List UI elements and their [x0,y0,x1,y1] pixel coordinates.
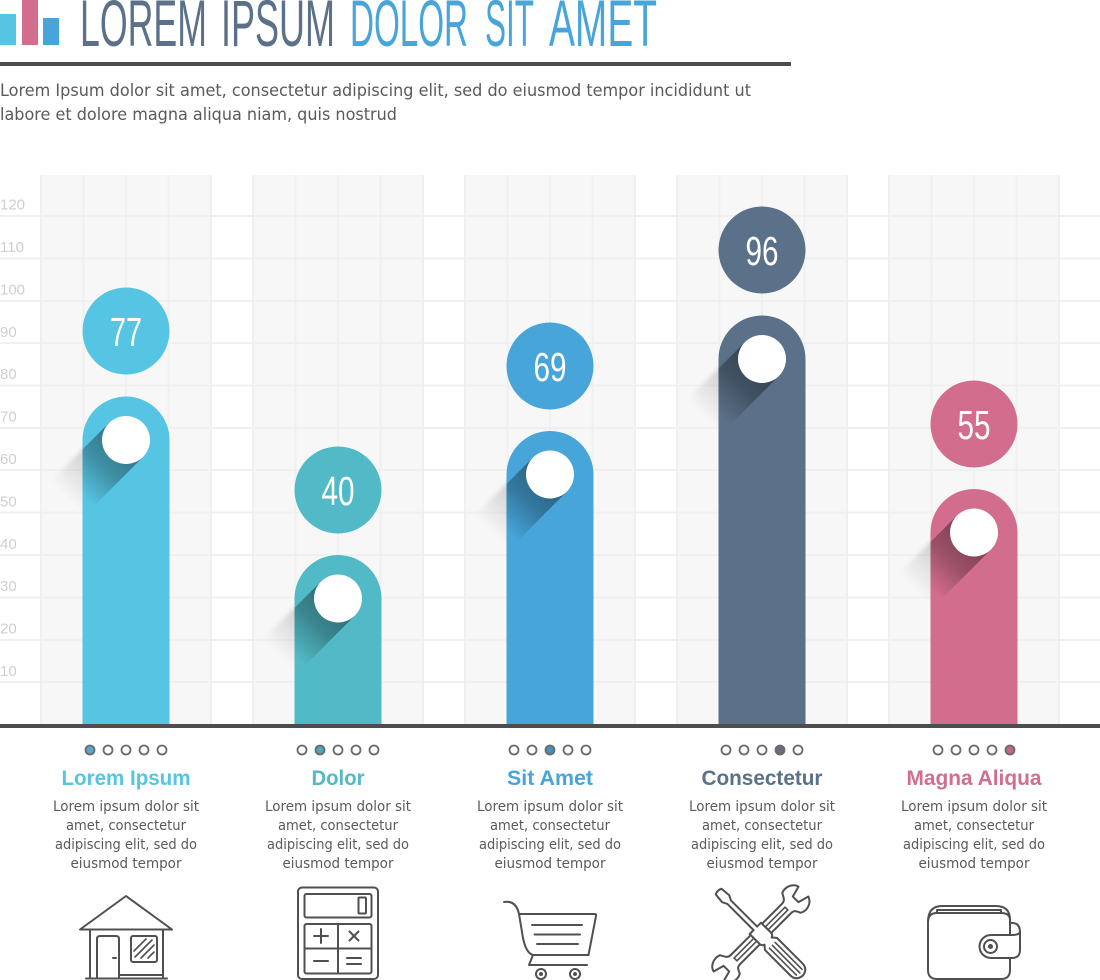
y axis labels [0,196,25,680]
y axis labels: 90 [0,324,17,341]
column: Sit Amet [477,746,623,979]
column: Lorem Ipsum [53,746,199,978]
y axis labels: 60 [0,451,17,468]
bar: Lorem Ipsum 77: 77 [110,309,142,355]
description: eiusmod tempor [494,856,606,872]
bar: Magna Aliqua 55 [890,380,1018,724]
y axis labels: 50 [0,494,17,510]
pagination dots [510,746,590,754]
y axis labels: 10 [0,663,17,680]
pagination dots [86,746,166,754]
heading: Consectetur [702,767,822,790]
heading: Magna Aliqua [906,767,1042,790]
description [901,799,1047,872]
description: amet, consectetur [914,818,1034,834]
description: amet, consectetur [702,818,822,834]
y axis labels: 40 [0,536,17,553]
y axis labels: 110 [0,239,24,256]
description: adipiscing elit, sed do [903,837,1045,853]
description: amet, consectetur [278,818,398,834]
icon: house [80,896,172,978]
description [53,799,199,872]
description: Lorem ipsum dolor sit [901,799,1047,815]
pagination dots [722,746,802,754]
heading: Dolor [312,767,364,790]
description: Lorem ipsum dolor sit [689,799,835,815]
chart baseline [0,724,1100,728]
description [689,799,835,872]
description: eiusmod tempor [70,856,182,872]
bar: Lorem Ipsum 77 [42,288,170,724]
bar: Dolor 40: 40 [322,468,354,514]
icon: crossed tools [708,881,814,980]
column: Dolor [265,746,411,979]
description: adipiscing elit, sed do [691,837,833,853]
header logo: bar icon [0,0,59,45]
y axis labels: 70 [0,408,17,426]
description: adipiscing elit, sed do [479,837,621,853]
pagination dots [934,746,1014,754]
description: eiusmod tempor [918,856,1030,872]
description: eiusmod tempor [706,856,818,872]
description [477,799,623,872]
header rule [0,62,791,66]
y axis labels: 120 [0,196,25,214]
chart grid background [0,175,1100,725]
heading: Sit Amet [507,767,593,790]
description: Lorem ipsum dolor sit [477,799,623,815]
icon: shopping cart [504,902,596,979]
bar: Sit Amet 69 [466,322,594,724]
bar: Consectetur 96: 96 [746,228,778,274]
y axis labels: 100 [0,282,25,298]
description: Lorem ipsum dolor sit [265,799,411,815]
description: eiusmod tempor [282,856,394,872]
heading: Lorem Ipsum [62,767,190,790]
column: Consectetur [689,746,835,980]
description: Lorem ipsum dolor sit [53,799,199,815]
y axis labels: 80 [0,366,17,383]
description: amet, consectetur [66,818,186,834]
y axis labels: 30 [0,578,17,595]
description: adipiscing elit, sed do [267,837,409,853]
icon: calculator [298,888,378,979]
bar: Magna Aliqua 55: 55 [958,402,990,448]
bar: Dolor 40 [254,446,382,724]
description: adipiscing elit, sed do [55,837,197,853]
pagination dots [298,746,378,754]
intro text [0,81,751,125]
description: amet, consectetur [490,818,610,834]
intro text: Lorem Ipsum dolor sit amet, consectetur adipiscing elit, sed do eiusmod tempor incididunt ut [0,81,751,101]
column: Magna Aliqua [901,746,1047,979]
y axis labels: 20 [0,620,17,638]
icon: wallet [928,906,1020,979]
bar: Consectetur 96 [678,206,806,724]
description [265,799,411,872]
bar: Sit Amet 69: 69 [534,344,566,390]
intro text: labore et dolore magna aliqua niam, quis nostrud [0,105,397,125]
